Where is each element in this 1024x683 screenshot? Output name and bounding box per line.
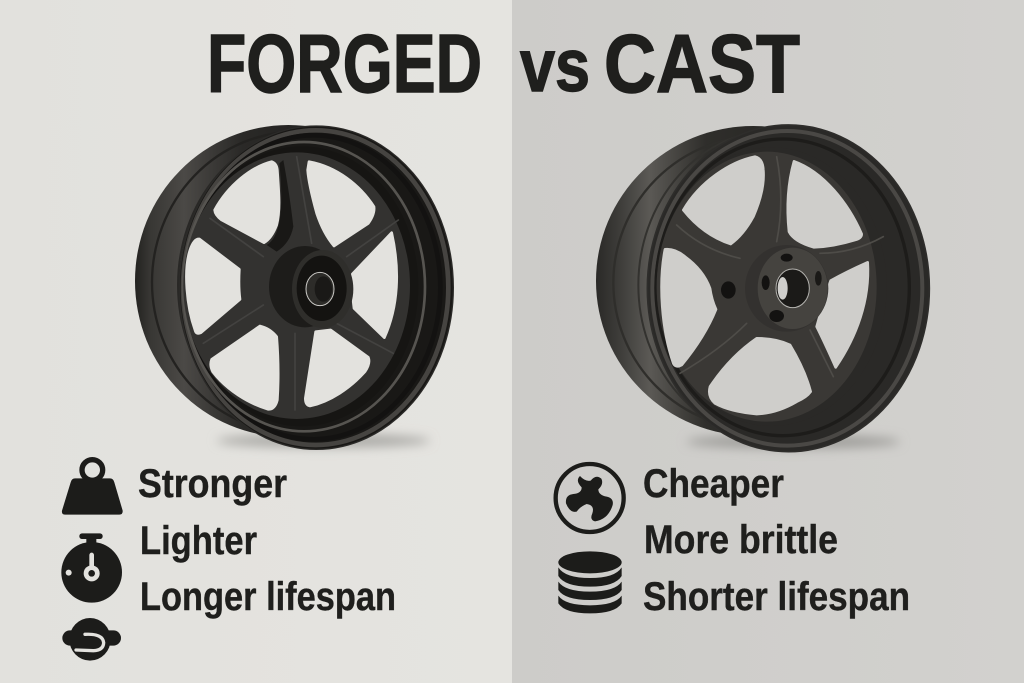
forged spoke highlights [203,157,398,410]
cast wheel openings [662,157,868,414]
forged hub [269,246,353,328]
cast wheel [596,125,929,452]
cast feature list: Shorter lifespan [643,575,910,619]
forged feature list: Stronger [138,462,287,506]
icon: cast metal blob [556,464,624,532]
title: CAST [604,17,800,110]
cast feature list: More brittle [644,518,838,562]
cast feature list [643,462,910,619]
cast spoke highlights [677,157,883,377]
cast hub [721,245,828,332]
panel: forged background [0,0,512,683]
title [207,17,800,110]
forged feature icons [61,460,123,661]
icon: lifespan link [62,618,121,661]
cast rim rings [647,125,929,452]
icon: weight [62,460,123,515]
panel: cast background [512,0,1024,683]
cast feature icons [556,464,624,613]
forged feature list: Longer lifespan [140,575,396,619]
forged feature list [138,462,396,619]
title: FORGED [207,17,482,110]
title: vs [520,24,590,107]
forged wheel openings [186,162,397,409]
forged feature list: Lighter [140,519,257,563]
forged rim rings [179,126,453,449]
forged wheel [135,125,453,449]
cast feature list: Cheaper [643,462,784,506]
icon: coin stack [558,551,622,613]
icon: stopwatch [61,533,122,603]
